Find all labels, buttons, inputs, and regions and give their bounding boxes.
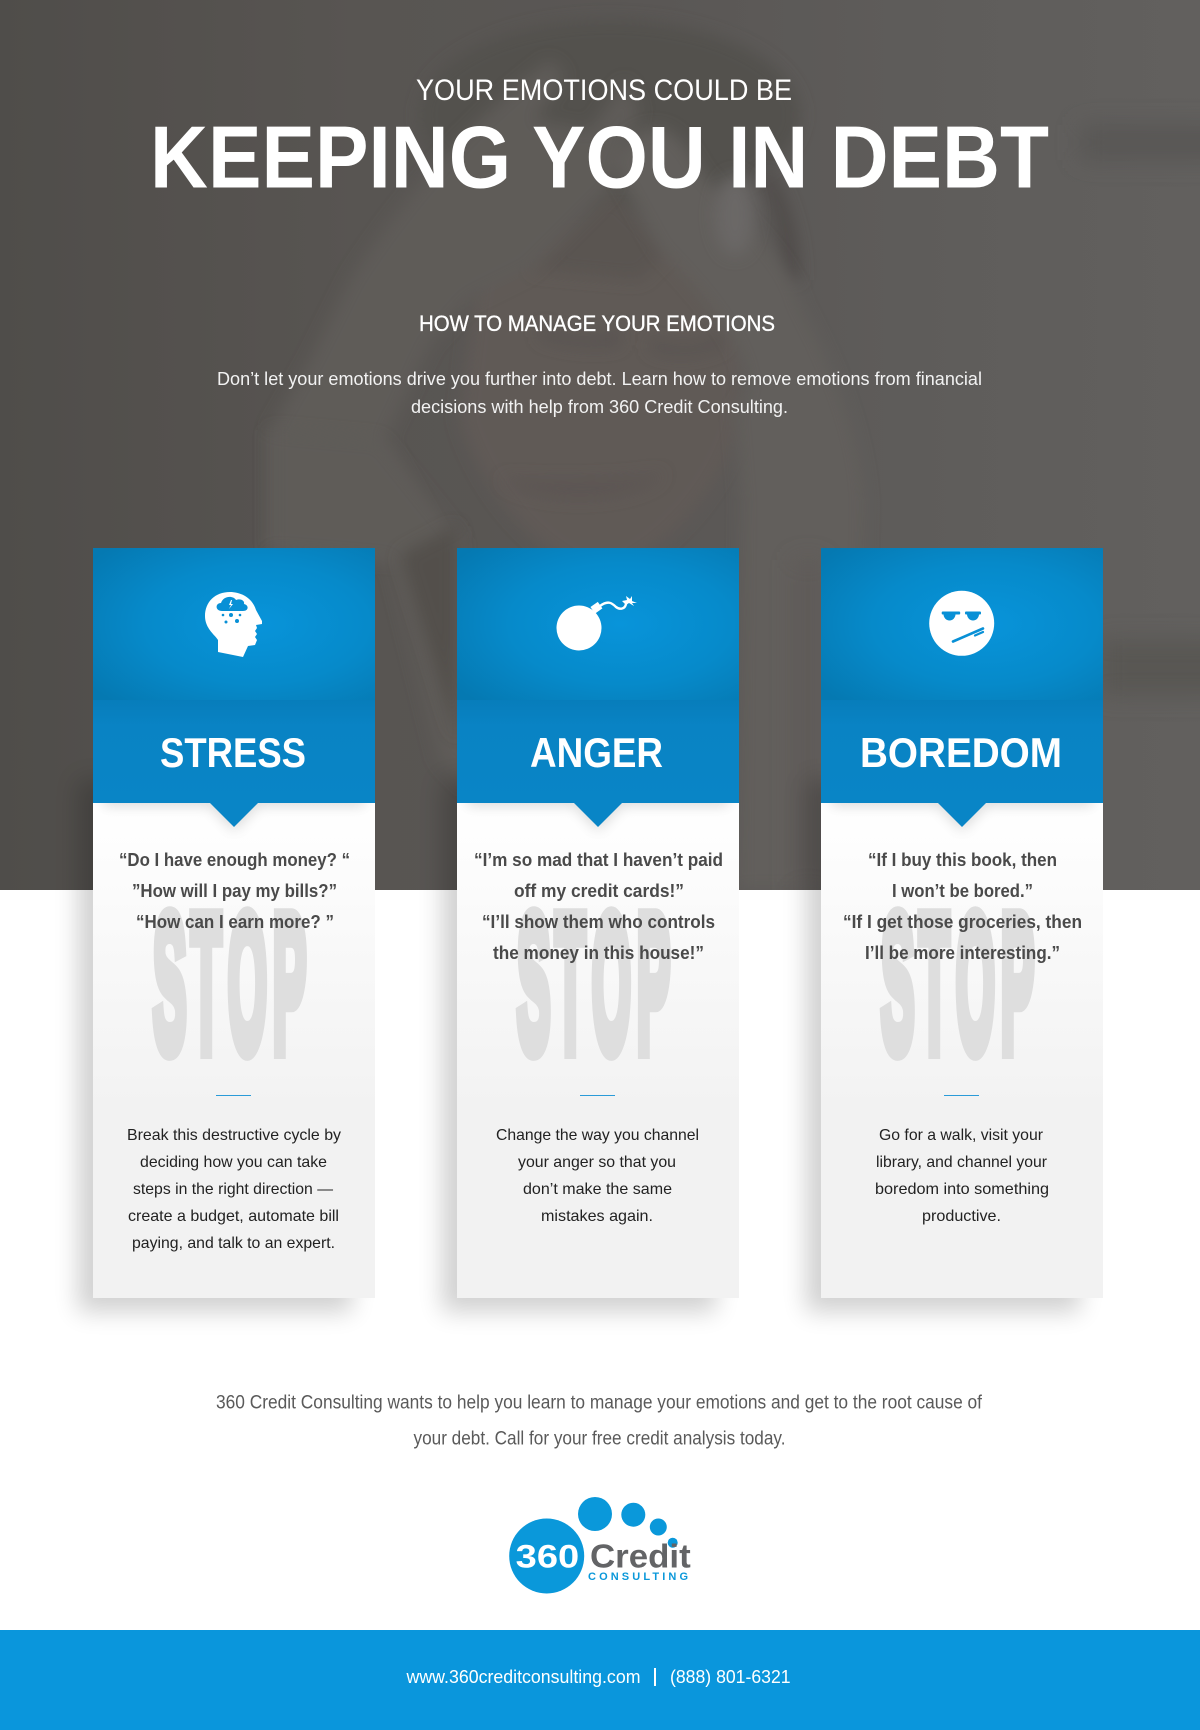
quotes xyxy=(474,849,723,963)
watermark: stop: STOP xyxy=(153,875,306,1091)
intro paragraph: Don’t let your emotions drive you further into debt. Learn how to remove emotions from financial xyxy=(217,369,982,389)
advice text: Change the way you channel xyxy=(496,1127,699,1144)
title block xyxy=(150,74,1049,336)
intro paragraph xyxy=(217,369,982,417)
quotes: I’ll be more interesting.” xyxy=(865,942,1060,963)
quotes: the money in this house!” xyxy=(493,942,704,963)
advice text: productive. xyxy=(922,1208,1001,1225)
advice text: deciding how you can take xyxy=(140,1154,327,1171)
advice text: create a budget, automate bill xyxy=(128,1208,339,1225)
closing text: 360 Credit Consulting wants to help you learn to manage your emotions and get to the root cause of xyxy=(216,1392,983,1414)
advice text: Break this destructive cycle by xyxy=(127,1127,341,1144)
logo: 360 credit consulting: Credit xyxy=(590,1538,691,1575)
advice text: don’t make the same xyxy=(523,1181,672,1198)
icon: head with storm cloud xyxy=(205,592,262,657)
footer bar xyxy=(0,1630,1200,1730)
subheading: HOW TO MANAGE YOUR EMOTIONS xyxy=(419,311,775,336)
quotes xyxy=(843,849,1082,963)
card shadows xyxy=(78,780,1080,1312)
advice text: steps in the right direction — xyxy=(133,1181,333,1198)
logo: 360 credit consulting: 360 xyxy=(516,1538,579,1574)
kicker heading: YOUR EMOTIONS COULD BE xyxy=(416,74,792,107)
advice text xyxy=(496,1127,699,1225)
main title: KEEPING YOU IN DEBT xyxy=(150,108,1049,206)
heading: stress: STRESS xyxy=(160,729,306,776)
advice text: paying, and talk to an expert. xyxy=(132,1235,335,1252)
quotes: I won’t be bored.” xyxy=(892,880,1033,901)
watermark: stop: STOP xyxy=(517,875,670,1091)
phone number: (888) 801-6321 xyxy=(670,1666,791,1687)
closing text: your debt. Call for your free credit analysis today. xyxy=(414,1428,786,1450)
quotes: “I’ll show them who controls xyxy=(482,911,715,932)
advice text: library, and channel your xyxy=(876,1154,1048,1171)
eyes and mouth xyxy=(540,325,620,347)
forehead shadow xyxy=(530,190,670,280)
logo: 360 credit consulting xyxy=(509,1497,691,1594)
heading: boredom: BOREDOM xyxy=(860,729,1062,776)
advice text: your anger so that you xyxy=(518,1154,676,1171)
website: www.360creditconsulting.com xyxy=(406,1666,640,1687)
ring xyxy=(718,174,756,245)
advice text: mistakes again. xyxy=(541,1208,653,1225)
advice text xyxy=(127,1127,341,1252)
quotes: “I’m so mad that I haven’t paid xyxy=(474,849,723,870)
quotes xyxy=(119,849,350,932)
closing text xyxy=(216,1392,983,1450)
hero photo background xyxy=(0,0,1200,890)
quotes: “If I buy this book, then xyxy=(868,849,1057,870)
advice text: boredom into something xyxy=(875,1181,1049,1198)
icon: bomb xyxy=(556,596,637,650)
quotes: off my credit cards!” xyxy=(514,880,684,901)
quotes: ”How will I pay my bills?” xyxy=(132,880,337,901)
heading: anger: ANGER xyxy=(530,729,663,776)
right hand and arm xyxy=(620,128,785,440)
intro paragraph: decisions with help from 360 Credit Consulting. xyxy=(411,397,788,417)
panel: stress xyxy=(93,548,375,1298)
face xyxy=(474,304,502,470)
watermark: stop: STOP xyxy=(881,875,1034,1091)
quotes: “If I get those groceries, then xyxy=(843,911,1082,932)
hair xyxy=(574,33,795,178)
left hand and arm xyxy=(287,69,634,424)
advice text xyxy=(875,1127,1049,1225)
quotes: “Do I have enough money? “ xyxy=(119,849,350,870)
quotes: “How can I earn more? ” xyxy=(136,911,334,932)
logo: 360 credit consulting: CONSULTING xyxy=(588,1571,688,1583)
advice text: Go for a walk, visit your xyxy=(879,1127,1044,1144)
panel: anger xyxy=(457,548,739,1298)
icon: bored face xyxy=(929,591,994,656)
panel: boredom xyxy=(821,548,1103,1298)
